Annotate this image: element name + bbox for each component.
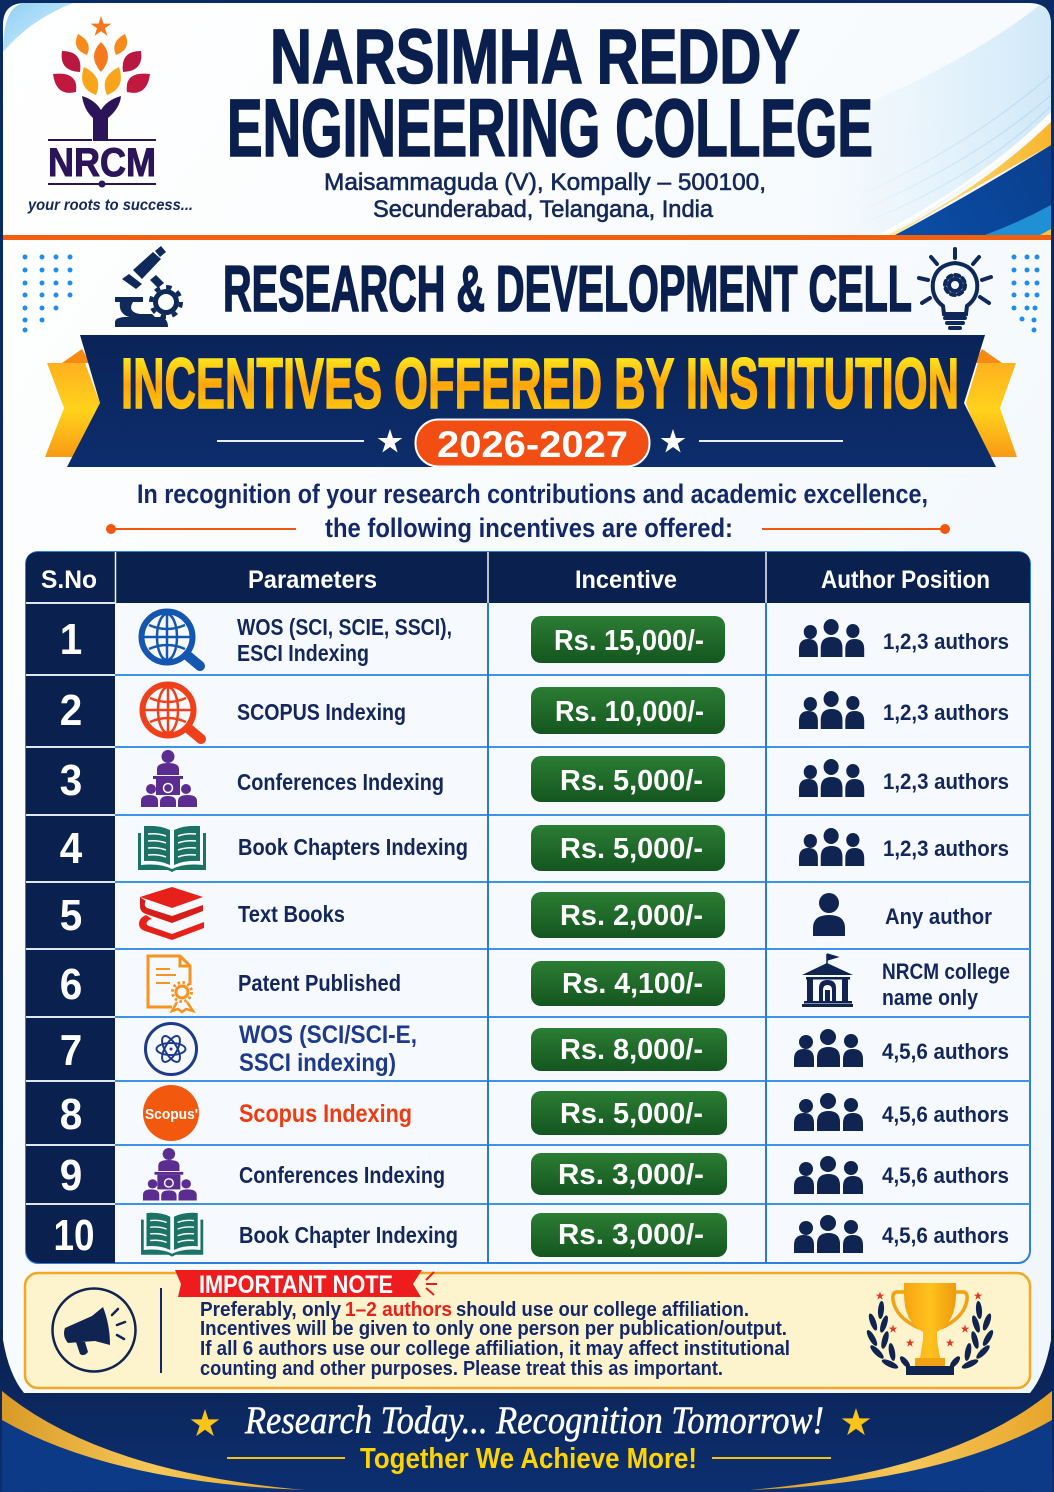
note text: Preferably, only [200,1299,342,1321]
logo star [91,16,111,36]
banner star right [661,429,685,453]
row 2 [60,684,1009,739]
college address [324,169,766,223]
note divider [160,1288,162,1373]
author 6: NRCM college [882,959,1010,984]
logo dot [98,180,106,188]
row 7: 7 [60,1026,82,1075]
row 8: 8 [60,1090,82,1139]
footer star right [842,1408,870,1435]
note text: Incentives will be given to only one person per publication/output. [200,1318,787,1340]
incentive 3: Rs. 5,000/- [560,765,703,797]
row 10: 10 [54,1211,94,1260]
note background [25,1273,1030,1388]
author 4: 1,2,3 authors [883,836,1009,861]
author 6: name only [882,985,979,1010]
author 3: 1,2,3 authors [883,769,1009,794]
header: Author Position: Author Position [821,566,990,594]
footer star left [191,1409,219,1436]
incentive 5: Rs. 2,000/- [560,900,703,932]
header: Parameters: Parameters [248,566,377,594]
laurel right [948,1301,995,1371]
author 8: 4,5,6 authors [882,1102,1009,1127]
trophy plinth [915,1358,945,1366]
row 4 [60,824,1009,873]
logo tagline: your roots to success... [27,197,193,214]
icon: megaphone [52,1288,136,1372]
logo rules [48,140,156,184]
intro rule right [762,524,950,534]
icon: three authors [794,1215,863,1253]
row 5: 5 [60,891,82,940]
author 9: 4,5,6 authors [882,1163,1009,1188]
icon: blue globe search [142,612,200,666]
icon: three authors [794,1093,863,1131]
icon: trophy with laurel [865,1283,995,1375]
row 3: 3 [60,756,82,805]
banner star left [378,429,402,453]
college address: Secunderabad, Telangana, India [373,196,714,223]
table body [26,552,1030,1263]
incentive 9: Rs. 3,000/- [558,1159,704,1191]
incentive 4: Rs. 5,000/- [560,833,703,865]
row 2: 2 [60,686,82,735]
header: S.No: S.No [41,566,97,594]
row 9: 9 [60,1151,82,1200]
logo trunk [82,96,121,141]
banner rule left [217,440,364,442]
icon: microscope with gear [115,246,181,327]
title: college name: NARSIMHA REDDY [270,14,800,100]
icon: three authors [799,828,864,866]
row 4: 4 [60,824,83,873]
author 5: Any author [885,904,992,929]
icon: open book [141,1213,203,1257]
incentive 8: Rs. 5,000/- [560,1098,703,1130]
college address: Maisammaguda (V), Kompally – 500100, [324,169,766,196]
left ribbon fold [62,349,90,363]
banner rule right [699,440,843,442]
note text: 1–2 authors [345,1299,452,1321]
icon: three authors [799,691,864,729]
intro rule left [106,524,296,534]
row 7 [60,1021,1009,1077]
icon: conference speaker [141,750,197,807]
incentive 2: Rs. 10,000/- [555,696,704,728]
parameter 3: Conferences Indexing [237,769,444,795]
parameter 9: Conferences Indexing [239,1162,445,1188]
icon: three authors [794,1029,863,1067]
incentive 6 [531,961,725,1006]
banner body [67,335,996,467]
parameter 7 [239,1021,417,1077]
icon: Scopus badge: Scopus' [145,1107,198,1123]
left gold ribbon [45,363,100,457]
parameter 1: ESCI Indexing [237,640,369,666]
incentive 4 [531,825,725,871]
parameter 1: WOS (SCI, SCIE, SSCI), [237,614,452,640]
trophy stars [876,1292,982,1347]
trophy cup [904,1283,956,1358]
header decoration: top-left swoosh [3,3,73,52]
footer slogan: Research Today... Recognition Tomorrow! [244,1399,824,1442]
row 8 [60,1085,1009,1141]
orange header rule [3,235,1051,240]
parameter 10: Book Chapter Indexing [239,1222,458,1248]
table: incentives [26,552,1030,1263]
icon: conference speaker [143,1148,197,1200]
panel: important note [25,1270,1030,1388]
note ribbon: IMPORTANT NOTE [199,1271,393,1299]
incentive 7: Rs. 8,000/- [560,1034,703,1066]
author 2: 1,2,3 authors [883,700,1009,725]
parameter 5: Text Books [238,901,345,927]
note text: counting and other purposes. Please treat this as important. [200,1358,723,1380]
footer tagline: Together We Achieve More! [360,1443,697,1475]
incentive 3 [531,756,725,802]
parameter 1 [237,614,452,666]
icon: patent certificate [148,956,193,1012]
row 6: 6 [60,960,82,1009]
laurel left [865,1301,912,1371]
author 1: 1,2,3 authors [883,629,1009,654]
incentive 1 [531,616,725,663]
row 3 [60,750,1009,807]
icon: Scopus badge [143,1085,199,1141]
logo: NRCM tree [27,16,193,214]
parameter 8: Scopus Indexing [239,1100,412,1128]
note text: If all 6 authors use our college affiliation, it may affect institutional [200,1338,790,1360]
icon: red text books [139,887,204,940]
incentive 7 [531,1028,727,1071]
icon: single author [813,893,845,936]
footer swoosh right [750,1391,1052,1492]
intro text: In recognition of your research contributions and academic excellence, [137,479,928,509]
incentive 8 [531,1091,727,1135]
note sparks [426,1272,437,1295]
incentive 5 [531,892,725,938]
incentive 2 [531,687,725,734]
incentive 9 [531,1153,727,1195]
intro text: the following incentives are offered: [325,513,733,543]
incentive 10: Rs. 3,000/- [558,1219,704,1251]
icon: light bulb with gear [919,249,991,328]
icon: three authors [799,759,864,797]
table header background [26,552,1030,603]
incentive 6: Rs. 4,100/- [562,968,703,1000]
header: Incentive: Incentive [575,566,677,594]
banner: incentives [45,335,1017,467]
table grid [26,552,1030,1263]
author 6 [882,959,1010,1010]
year badge [416,420,650,466]
incentive 10 [531,1213,727,1257]
row 5 [60,887,992,940]
intro text [137,479,928,543]
author 7: 4,5,6 authors [882,1039,1009,1064]
trophy base [906,1366,954,1375]
row 9 [60,1148,1009,1200]
icon: three authors [794,1156,863,1194]
row 1 [60,612,1009,666]
parameter 6: Patent Published [238,970,401,996]
footer swoosh left [2,1391,305,1492]
icon: atom [146,1024,196,1074]
note text: should use our college affiliation. [456,1299,749,1321]
logo leaves [53,34,150,95]
title: college name [227,14,873,174]
year badge: 2026-2027 [437,424,628,465]
header decoration: top-right waves [800,5,1051,235]
parameter 2: SCOPUS Indexing [237,699,406,725]
serial number column [26,603,115,1263]
right gold ribbon [966,363,1017,457]
icon: open book [138,826,206,872]
icon: red globe search [142,684,201,739]
trophy handles [893,1292,967,1328]
right ribbon fold [974,349,1002,363]
footer background [0,1330,1054,1492]
parameter 7: SSCI indexing) [239,1049,396,1077]
row 1: 1 [60,615,82,664]
icon: three authors [799,619,864,657]
parameter 4: Book Chapters Indexing [238,834,468,860]
row 6 [60,954,1010,1012]
decorative dots right [1012,254,1040,332]
note text [200,1299,790,1380]
author 10: 4,5,6 authors [882,1223,1009,1248]
parameter 7: WOS (SCI/SCI-E, [239,1021,417,1049]
decorative dots left [22,254,72,332]
logo wordmark: NRCM [48,141,156,185]
incentive 1: Rs. 15,000/- [554,625,704,657]
row 10 [54,1211,1009,1260]
icon: college building [802,954,853,1007]
